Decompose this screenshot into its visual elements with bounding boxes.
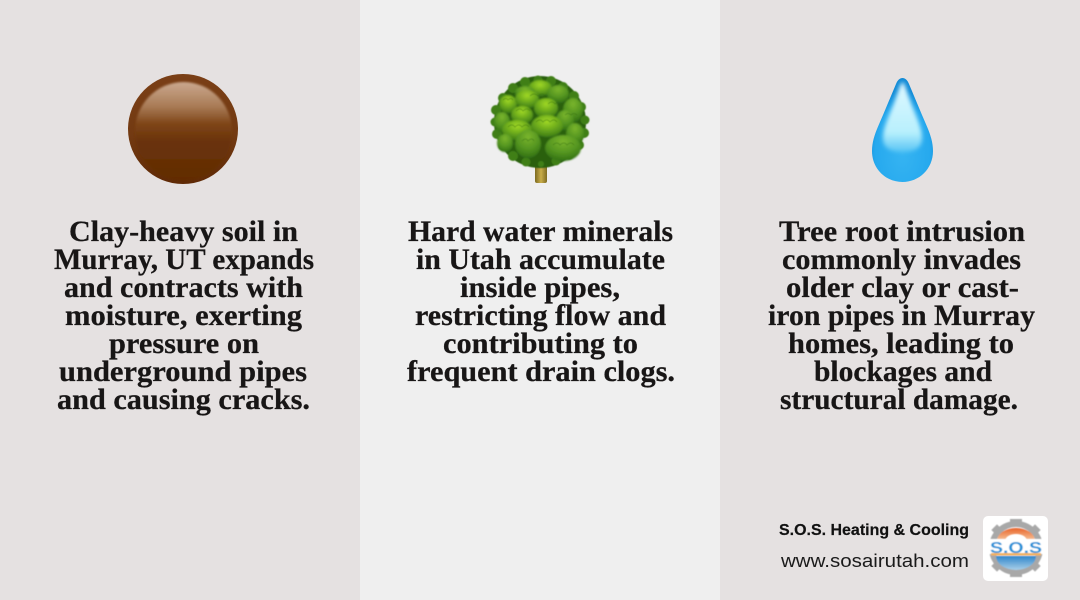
text block: clay soil: moisture, exerting — [65, 299, 302, 332]
text block: clay soil: Clay-heavy soil in — [69, 215, 298, 248]
text block: hard water: contributing to — [443, 327, 638, 360]
text block: tree roots: homes, leading to — [788, 327, 1014, 360]
icon: S.O.S logo — [983, 516, 1048, 581]
panel: water column background — [720, 0, 1080, 600]
text block: hard water — [407, 215, 675, 388]
website: www.sosairutah.com — [780, 550, 969, 571]
text block: tree roots: commonly invades — [782, 243, 1021, 276]
panel: tree column background — [360, 0, 720, 600]
text block: tree roots: blockages and — [814, 355, 992, 388]
text block: tree roots: Tree root intrusion — [779, 215, 1025, 248]
text block: clay soil: Murray, UT expands — [54, 243, 314, 276]
text block: hard water: frequent drain clogs. — [407, 355, 675, 388]
text block: hard water: in Utah accumulate — [416, 243, 665, 276]
icon: water drop — [872, 78, 933, 182]
text block: hard water: restricting flow and — [415, 299, 666, 332]
icon: S.O.S logo: S.O.S — [990, 540, 1042, 557]
company name: S.O.S. Heating & Cooling — [779, 522, 969, 539]
text block: tree roots: older clay or cast- — [786, 271, 1019, 304]
icon: tree — [490, 76, 590, 183]
text block: clay soil: pressure on — [109, 327, 259, 360]
text block: tree roots — [768, 215, 1035, 416]
icon: brown circle — [128, 74, 238, 184]
text block: hard water: inside pipes, — [460, 271, 620, 304]
text block: clay soil: and contracts with — [64, 271, 303, 304]
text block: hard water: Hard water minerals — [408, 215, 673, 248]
text block: tree roots: iron pipes in Murray — [768, 299, 1035, 332]
text block: clay soil: underground pipes — [59, 355, 307, 388]
panel: soil column background — [0, 0, 360, 600]
text block: tree roots: structural damage. — [780, 383, 1018, 416]
text block: clay soil: and causing cracks. — [57, 383, 310, 416]
text block: clay soil — [54, 215, 314, 416]
